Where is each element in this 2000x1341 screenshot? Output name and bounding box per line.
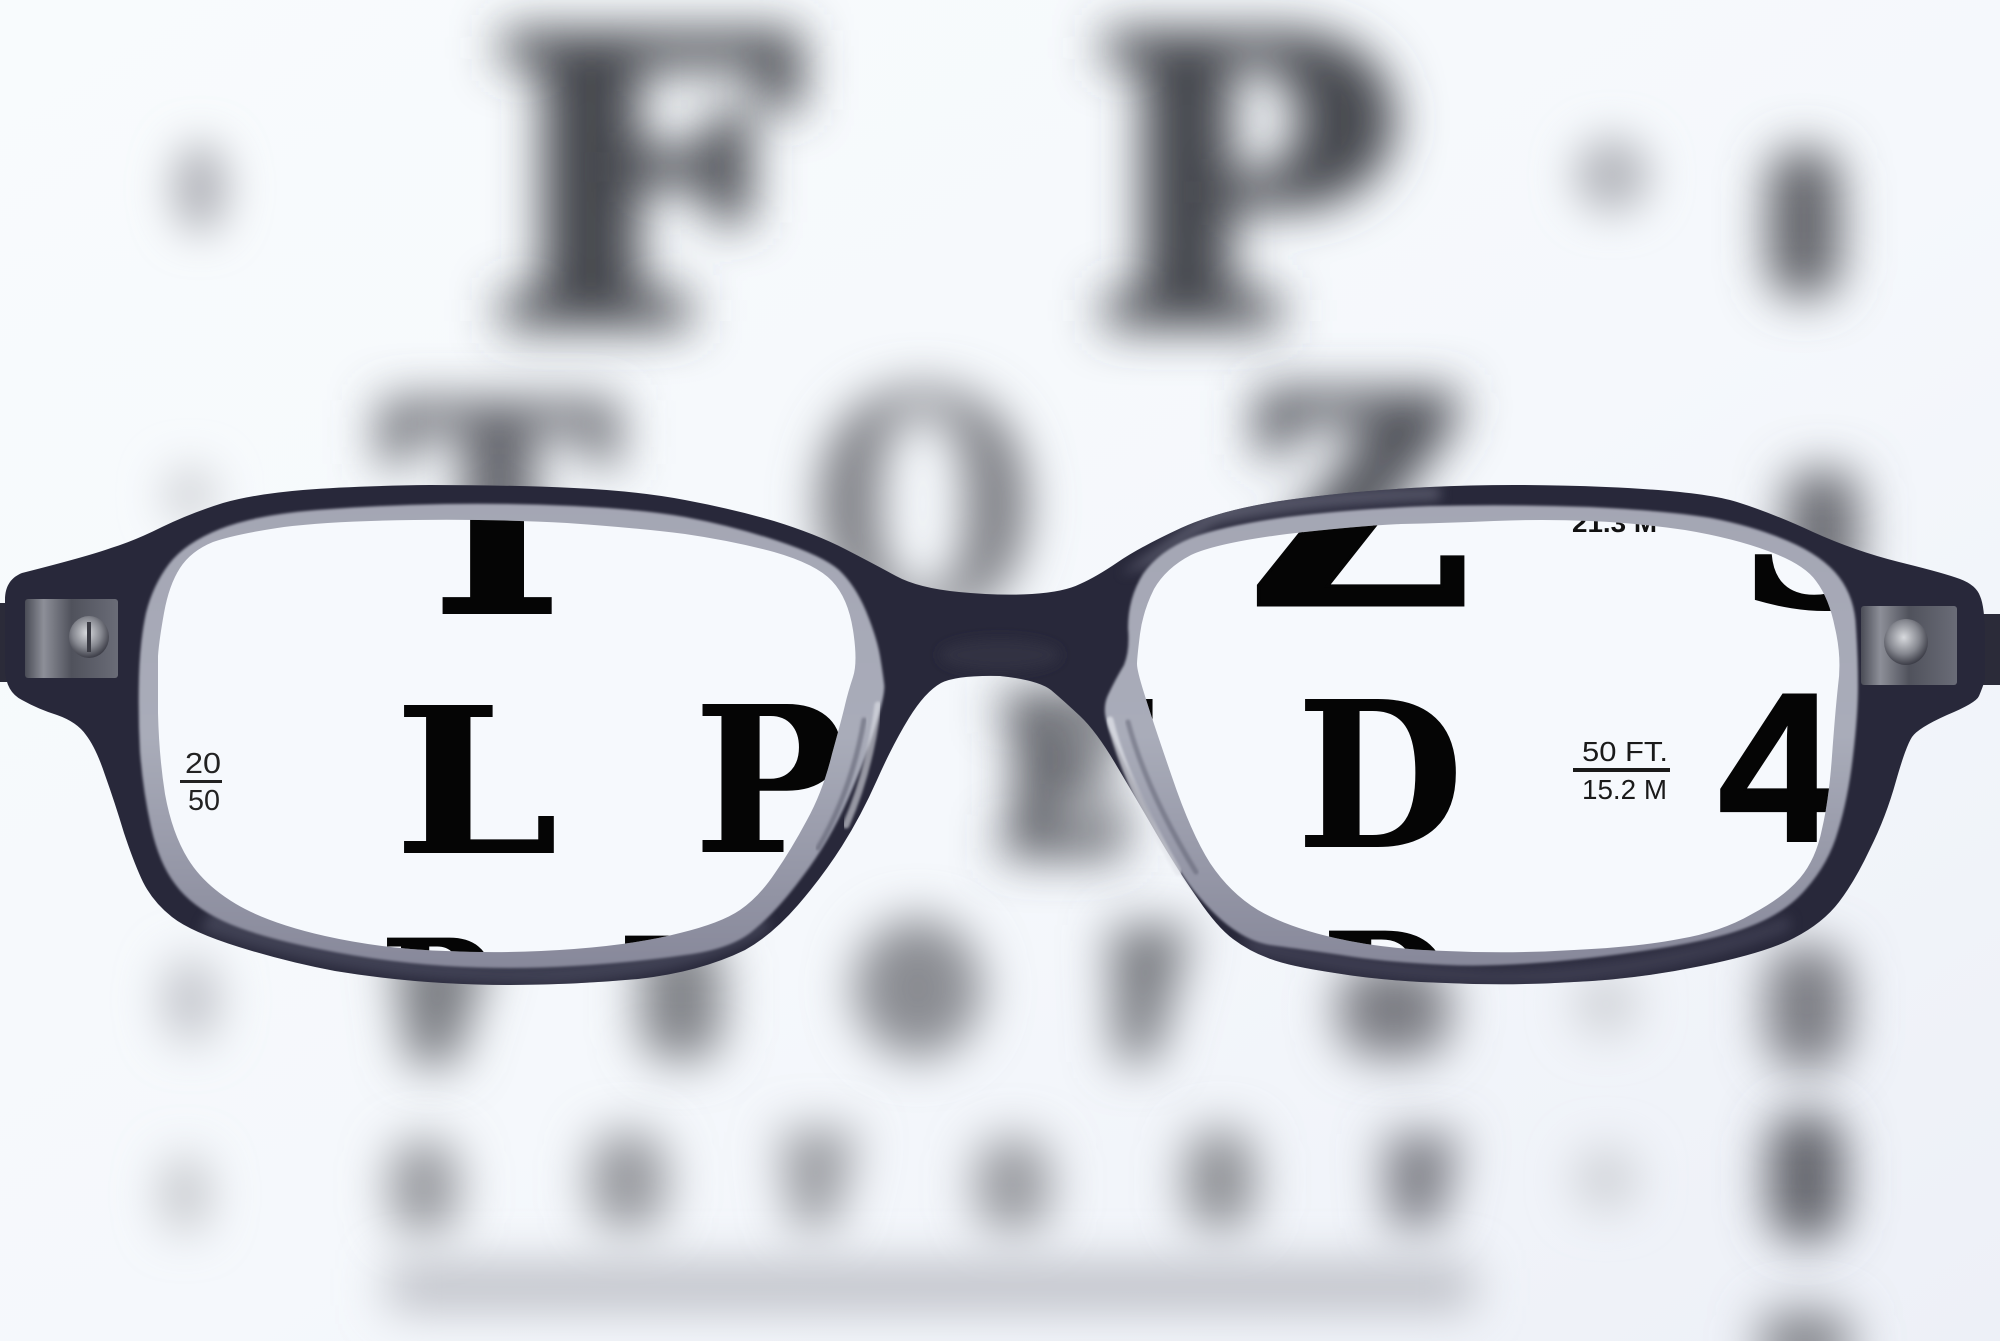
blurred column mark top right bbox=[1768, 148, 1840, 298]
nose pad highlight right bbox=[1110, 720, 1178, 872]
blurred column mark row two bbox=[1785, 470, 1859, 590]
sharp letter P: P bbox=[693, 661, 846, 900]
blurred bottom rule bbox=[388, 1266, 1473, 1308]
blurred mark bottom right bbox=[1760, 1310, 1850, 1341]
sharp letter L: L bbox=[393, 662, 559, 901]
left lens glass bbox=[150, 510, 870, 960]
sharp letter row four D: D bbox=[618, 905, 748, 1081]
blurred note upper left bbox=[172, 142, 228, 234]
frame front bbox=[5, 485, 1985, 985]
right lens view bbox=[1137, 520, 1840, 952]
left lens view bbox=[158, 520, 856, 952]
blurred letter E between lenses: E bbox=[1000, 657, 1125, 896]
left temple arm bbox=[0, 603, 30, 682]
nose pad highlight left bbox=[846, 705, 878, 825]
glasses frame bbox=[0, 485, 2000, 986]
blurred letter Z: Z bbox=[1248, 338, 1463, 673]
distance fraction 50 FT / 15.2 M: 15.2 M bbox=[1582, 774, 1667, 805]
sharp letter row four P: P bbox=[380, 907, 493, 1083]
left screw bbox=[69, 616, 109, 658]
row five blurs bbox=[163, 1112, 1844, 1242]
blurred small note row two bbox=[162, 465, 218, 525]
sharp numeral 3: 3 bbox=[1735, 340, 1933, 675]
distance fraction 50 FT / 15.2 M: 50 FT. bbox=[1582, 736, 1668, 767]
acuity fraction 20/50 bbox=[180, 752, 222, 810]
acuity fraction 20/50: 20 bbox=[185, 748, 221, 780]
blurred letter O: O bbox=[812, 333, 1034, 683]
sharp letter E edge: E bbox=[1010, 656, 1165, 895]
sharp letter row four D: D bbox=[1322, 900, 1452, 1076]
blurred letter T: T bbox=[383, 347, 615, 682]
right temple arm bbox=[1960, 614, 2000, 685]
left lens rim bbox=[139, 504, 884, 968]
nose pad shadow left bbox=[818, 720, 864, 848]
right hinge bbox=[1861, 606, 1957, 685]
clipped distance label: 21.3 M bbox=[1572, 508, 1657, 538]
row four blurs bbox=[165, 918, 1848, 1069]
sharp letter Z: Z bbox=[1247, 338, 1474, 673]
right lens glass bbox=[1130, 510, 1850, 960]
sharp letter T: T bbox=[391, 347, 603, 682]
nose pad shadow right bbox=[1128, 722, 1196, 872]
sharp letter D: D bbox=[1296, 656, 1464, 895]
bridge and edge sheen bbox=[200, 487, 1790, 986]
sharp numeral 4: 4 bbox=[1718, 649, 1836, 887]
right lens rim bbox=[1105, 505, 1858, 966]
blurred note upper right bbox=[1574, 137, 1650, 213]
distance fraction 50 FT / 15.2 M bbox=[1573, 742, 1670, 800]
right screw bbox=[1884, 619, 1928, 665]
acuity fraction 20/50: 50 bbox=[188, 785, 220, 817]
left hinge bbox=[25, 599, 118, 678]
